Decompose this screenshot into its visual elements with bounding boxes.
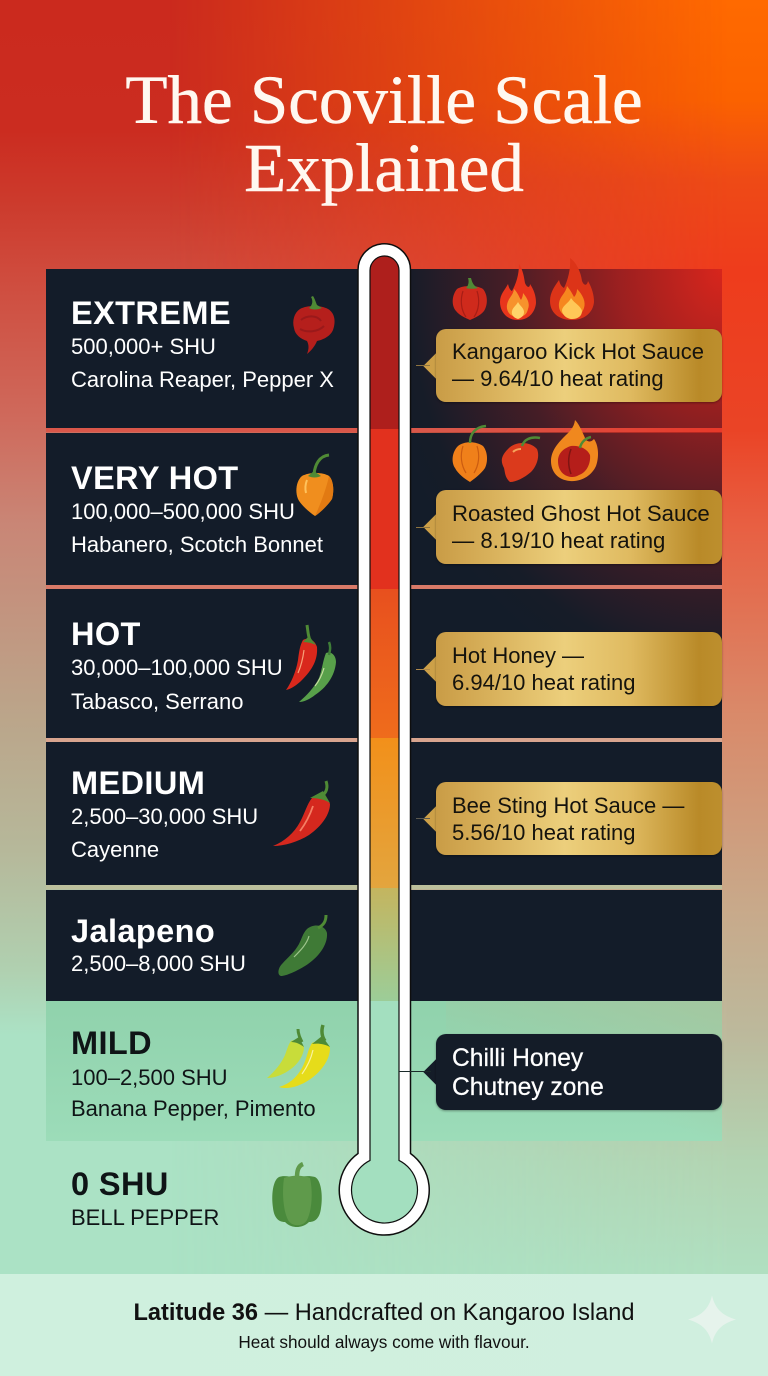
callout box 2 <box>436 490 722 564</box>
range and examples: 100,000–500,000 SHU <box>71 499 295 524</box>
icon: banana peppers <box>267 1024 330 1088</box>
title <box>125 62 643 206</box>
heading: Jalapeno <box>71 913 215 949</box>
green chilli <box>299 652 336 702</box>
icon: jalapeno <box>278 915 328 976</box>
heading: HOT <box>71 616 141 652</box>
callout box 4: 5.56/10 heat rating <box>452 820 635 845</box>
text: zero <box>71 1166 219 1230</box>
text: extreme <box>71 295 334 392</box>
orange pepper <box>453 442 487 482</box>
flame <box>500 264 536 320</box>
icon: tabasco and serrano <box>286 624 336 702</box>
icon: sparkle <box>688 1296 736 1343</box>
icon: habanero <box>296 454 334 516</box>
callout box 4 <box>436 782 722 855</box>
thermometer glass <box>339 244 429 1235</box>
panel: jalapeno band <box>46 890 722 1001</box>
label: BELL PEPPER <box>71 1205 219 1230</box>
panel: hot band <box>46 589 722 738</box>
range and examples: Cayenne <box>71 837 159 862</box>
panel: very hot band <box>46 433 722 585</box>
text: medium <box>71 765 258 862</box>
stem 3 <box>416 669 430 670</box>
title: Explained <box>244 130 524 206</box>
callout box 3: 6.94/10 heat rating <box>452 670 635 695</box>
background right colour ramp <box>245 0 768 1246</box>
callout box 2: — 8.19/10 heat rating <box>452 528 665 553</box>
range and examples <box>71 804 258 862</box>
heading: EXTREME <box>71 295 231 331</box>
icon: bell pepper <box>272 1162 322 1227</box>
stem 5 <box>399 1071 431 1072</box>
text: jalapeno <box>71 913 246 976</box>
red heat glow on right of bands <box>411 269 722 738</box>
text: very hot <box>71 460 323 557</box>
heading: MEDIUM <box>71 765 205 801</box>
thermometer inner outline <box>352 256 418 1223</box>
divider: extreme to very hot <box>46 428 722 432</box>
text: hot <box>71 616 283 714</box>
callout box 3 <box>436 632 722 706</box>
callout box 1: Kangaroo Kick Hot Sauce <box>452 339 704 364</box>
icon: carolina reaper <box>293 296 335 354</box>
divider: medium to jalapeno <box>46 885 722 889</box>
title: The Scoville Scale <box>125 62 643 138</box>
range and examples: 500,000+ SHU <box>71 334 216 359</box>
red chilli <box>286 639 317 690</box>
heading: MILD <box>71 1025 152 1061</box>
callout box 5: Chutney zone <box>452 1074 604 1101</box>
range and examples <box>71 499 323 557</box>
panel: medium band <box>46 742 722 885</box>
callout box 3: Hot Honey — <box>452 643 584 668</box>
callout box 2: Roasted Ghost Hot Sauce <box>452 501 710 526</box>
heading: VERY HOT <box>71 460 239 496</box>
range and examples: Banana Pepper, Pimento <box>71 1096 316 1121</box>
callout box 5 <box>436 1034 722 1110</box>
heading: 0 SHU <box>71 1166 169 1202</box>
right pepper <box>279 1041 330 1088</box>
text: mild <box>71 1025 316 1121</box>
callout box 5: Chilli Honey <box>452 1045 583 1072</box>
callout box 1 <box>436 329 722 402</box>
panel: extreme band <box>46 269 722 428</box>
icon group: very hot peppers <box>452 420 598 482</box>
range and examples <box>71 334 334 392</box>
stem 4 <box>416 818 430 819</box>
range and examples: Carolina Reaper, Pepper X <box>71 367 334 392</box>
range and examples: 2,500–30,000 SHU <box>71 804 258 829</box>
callout box 1: — 9.64/10 heat rating <box>452 366 664 391</box>
range and examples <box>71 655 283 714</box>
left pepper <box>267 1040 304 1078</box>
stem 2 <box>416 527 430 528</box>
range and examples: 100–2,500 SHU <box>71 1065 228 1090</box>
footer headline: Latitude 36 — Handcrafted on Kangaroo Island <box>134 1300 634 1326</box>
flaming pepper <box>551 420 598 481</box>
warm tint on right of mild band <box>446 1001 722 1141</box>
big flame <box>550 258 594 320</box>
range and examples: 30,000–100,000 SHU <box>71 655 283 680</box>
divider: hot to medium <box>46 738 722 742</box>
divider: very hot to hot <box>46 585 722 589</box>
thermometer <box>338 243 430 1236</box>
range: 2,500–8,000 SHU <box>71 951 246 976</box>
range and examples: Tabasco, Serrano <box>71 689 243 714</box>
thermometer fluid <box>352 256 417 1222</box>
icon group: extreme heat <box>452 258 594 320</box>
icon: cayenne <box>273 780 330 846</box>
panel: mild band <box>46 1001 722 1141</box>
footer tagline: Heat should always come with flavour. <box>238 1332 530 1352</box>
range and examples: Habanero, Scotch Bonnet <box>71 532 323 557</box>
callout box 4: Bee Sting Hot Sauce — <box>452 793 684 818</box>
footer <box>0 1274 768 1376</box>
stem 1 <box>416 365 430 366</box>
range and examples <box>71 1065 316 1121</box>
pepper <box>453 286 487 320</box>
red pepper <box>502 443 538 482</box>
